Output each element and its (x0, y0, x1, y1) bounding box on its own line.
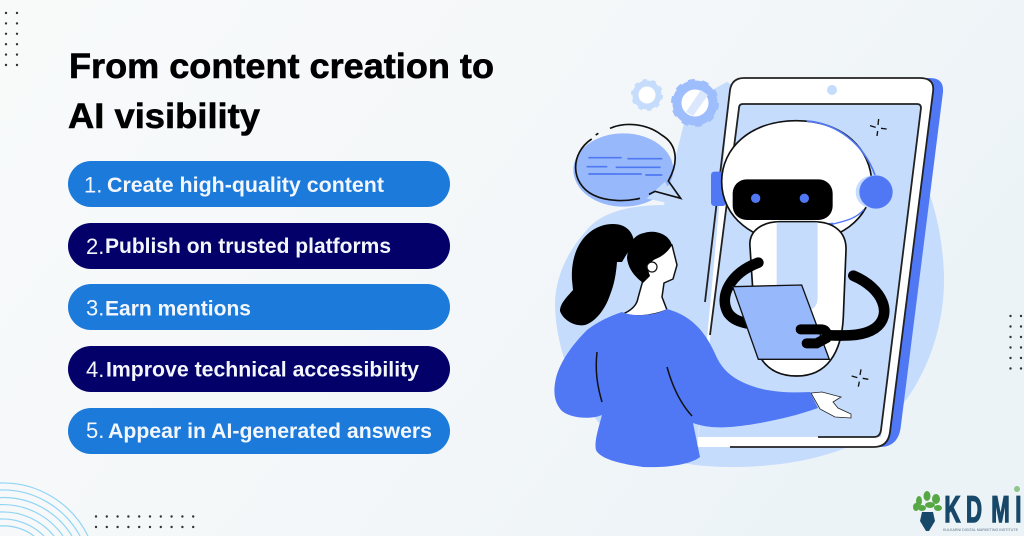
KDMI letters: KDMI (944, 489, 1021, 530)
tablet white body (697, 78, 933, 447)
sweater fold lines (596, 352, 692, 416)
step 4 (68, 346, 450, 392)
title: From content creation to (69, 47, 494, 86)
logo KDMI (913, 486, 1021, 532)
step 3: 3. (86, 296, 104, 320)
speech bubble (573, 124, 681, 207)
camera (827, 85, 837, 95)
pen nib (920, 512, 935, 531)
logo tagline: KULKARNI DIGITAL MARKETING INSTITUTE (943, 528, 1019, 532)
step 5: 5. (86, 418, 104, 443)
tablet (697, 78, 943, 447)
dots: top left (6, 13, 17, 70)
tablet screen (698, 104, 921, 437)
gear small (633, 81, 661, 109)
robot (711, 119, 893, 387)
title: AI visibility (68, 97, 261, 136)
hand (811, 392, 851, 418)
robot body group (725, 222, 884, 387)
registered mark (1014, 486, 1020, 492)
robot head group (711, 119, 893, 243)
step 5 (68, 408, 450, 454)
sweater (554, 309, 818, 467)
ponytail and hair (560, 224, 672, 325)
tablet blue back (790, 78, 943, 447)
step 1 (68, 161, 450, 207)
steps list (68, 161, 450, 454)
step 3 (68, 284, 450, 330)
face and neck (623, 240, 677, 316)
dots: bottom (96, 516, 196, 527)
step 2: 2. (86, 234, 104, 259)
title (68, 47, 494, 136)
step 2 (68, 223, 450, 269)
step 3: Earn mentions (105, 296, 251, 320)
leaves (913, 491, 942, 511)
step 4: Improve technical accessibility (106, 358, 419, 382)
step 1: Create high-quality content (107, 173, 384, 197)
illustration (554, 78, 944, 467)
concentric arcs bottom left (0, 483, 88, 536)
step 4: 4. (86, 357, 104, 382)
step 1: 1. (84, 172, 102, 198)
ear (647, 262, 657, 272)
background blob (555, 82, 944, 467)
gear large (674, 82, 716, 124)
step 2: Publish on trusted platforms (105, 234, 391, 258)
step 5: Appear in AI-generated answers (108, 419, 432, 443)
dots: right side (1010, 316, 1021, 373)
woman (554, 224, 851, 467)
